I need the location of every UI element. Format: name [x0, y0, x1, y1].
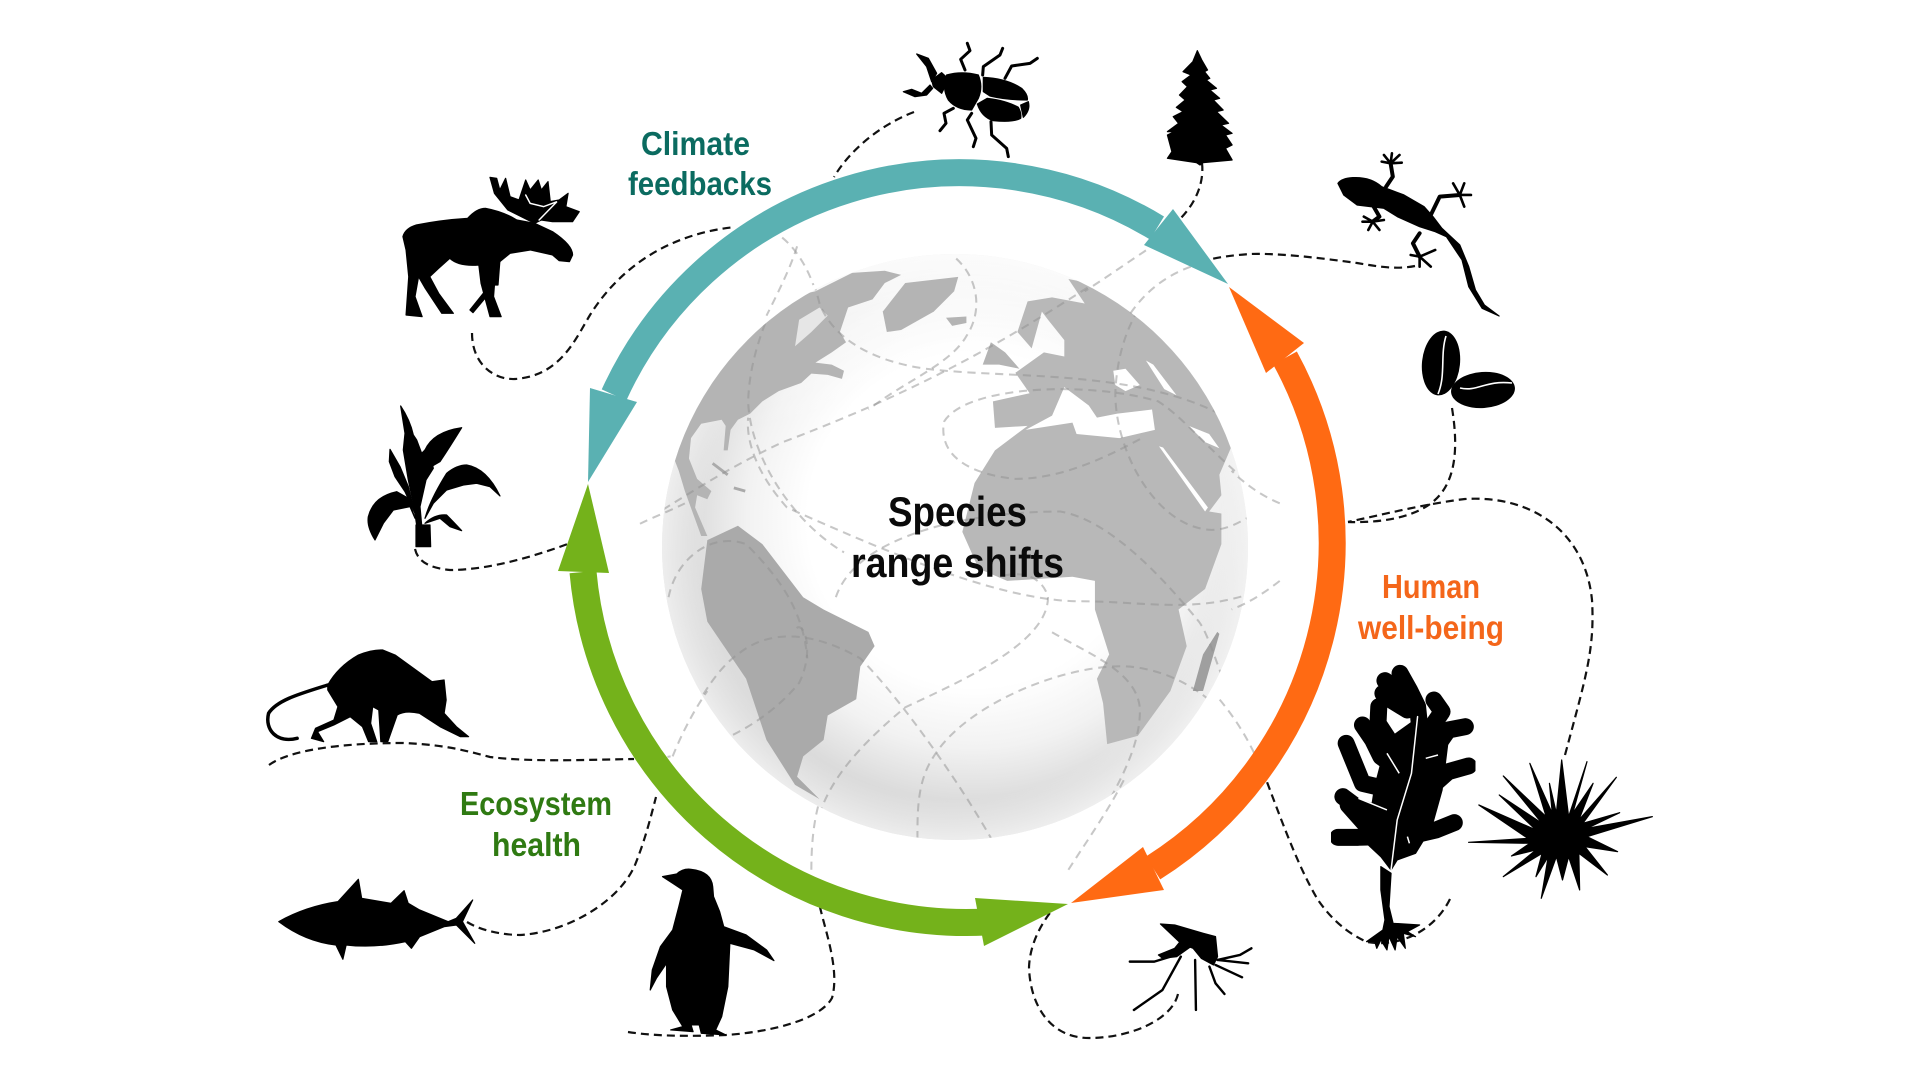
label: climate feedbacks: [628, 125, 772, 202]
label: ecosystem health: health: [492, 826, 581, 863]
greenland: [883, 277, 958, 332]
icon: sea urchin: [1469, 760, 1652, 898]
red sea: [1159, 446, 1208, 512]
migration path lines: [269, 112, 1593, 1038]
caspian sea: [1146, 361, 1177, 395]
icon: mosquito: [1130, 924, 1251, 1010]
mediterranean sea: [1026, 387, 1155, 438]
grey range lines between globe and ring: [640, 230, 1280, 870]
uk: [983, 342, 1019, 369]
title: species range shifts: range shifts: [851, 539, 1064, 586]
continents: [664, 258, 1247, 838]
arrow: human well-being ring segment: [1071, 287, 1332, 903]
icon: kelp: [1338, 673, 1469, 950]
icon: banana plant: [368, 406, 500, 547]
black sea: [1113, 369, 1140, 391]
icon: coffee beans: [1419, 329, 1516, 410]
icon: spruce tree: [1167, 51, 1232, 165]
globe: [662, 258, 1248, 840]
hudson bay: [795, 308, 828, 346]
label: human well-being: well-being: [1357, 609, 1504, 646]
arrow: climate feedbacks ring segment: [588, 173, 1228, 482]
title: species range shifts: [851, 488, 1064, 586]
iceland: [946, 316, 966, 326]
dashed range lines on globe: [640, 230, 1280, 870]
label: climate feedbacks: feedbacks: [628, 165, 772, 202]
arrow: ecosystem health ring segment: [558, 484, 1068, 946]
label: climate feedbacks: Climate: [641, 125, 750, 162]
south america: [701, 526, 875, 799]
title: species range shifts: Species: [888, 488, 1027, 535]
icon: penguin: [650, 869, 774, 1035]
label: ecosystem health: Ecosystem: [460, 785, 612, 822]
icon: gecko: [1338, 153, 1499, 316]
icon: moose: [403, 177, 579, 317]
caribbean islands: [713, 463, 745, 491]
madagascar: [1193, 632, 1219, 691]
persian gulf: [1189, 426, 1219, 448]
label: human well-being: Human: [1382, 568, 1480, 605]
afro-eurasia: [962, 279, 1231, 744]
icon: opossum: [268, 650, 469, 742]
north america: [664, 271, 901, 536]
icon: beetle: [903, 43, 1037, 157]
label: human well-being: [1357, 568, 1504, 646]
label: ecosystem health: [460, 785, 612, 863]
icon: tuna: [279, 879, 475, 959]
